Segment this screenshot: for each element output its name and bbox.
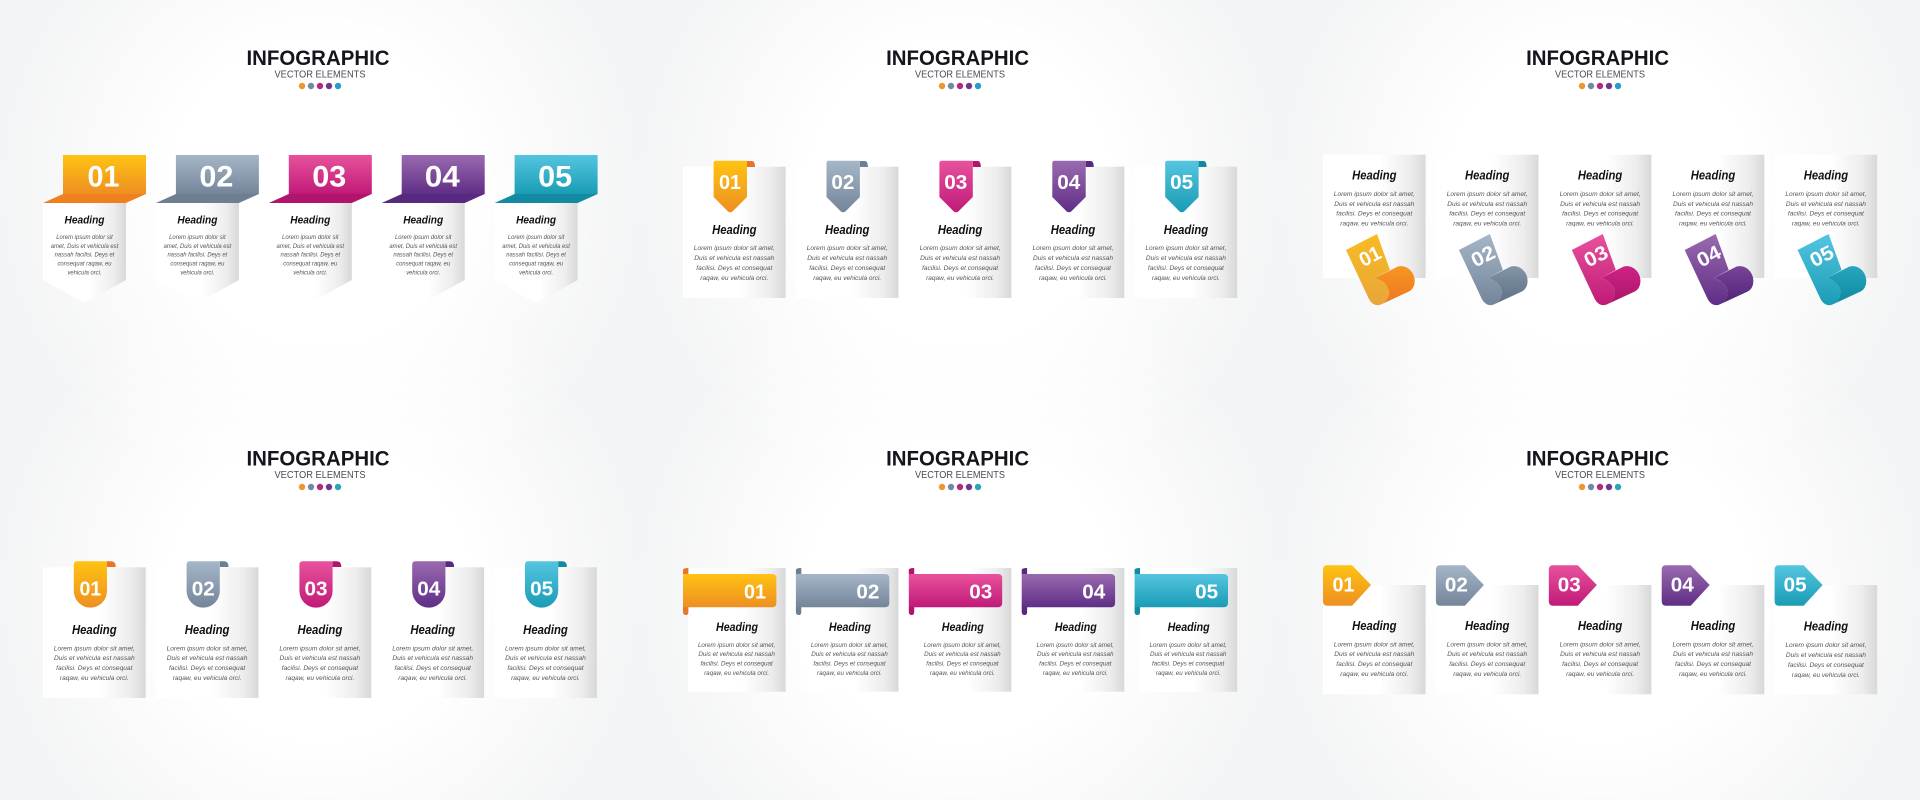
card 03: 03 bbox=[944, 172, 967, 194]
card 02: Lorem ipsum dolor sit bbox=[169, 234, 226, 241]
card 04: raqaw, eu vehicula orci. bbox=[1679, 671, 1747, 678]
card 05 bbox=[1775, 565, 1877, 694]
card 04 bbox=[1022, 161, 1124, 298]
card 04 bbox=[382, 155, 485, 303]
card 01: Heading bbox=[1352, 619, 1397, 633]
card 05 bbox=[1135, 161, 1237, 298]
card 03: raqaw, eu vehicula orci. bbox=[286, 675, 354, 682]
card 01: 01 bbox=[1356, 242, 1385, 272]
title block 6 bbox=[1526, 447, 1669, 490]
card 02: 02 bbox=[1445, 575, 1468, 597]
card 04: 04 bbox=[1693, 241, 1726, 272]
card 04 bbox=[1022, 568, 1124, 692]
card 02: 02 bbox=[1468, 242, 1499, 272]
card 05: Heading bbox=[516, 214, 556, 226]
card 04: amet, Duis et vehicula est bbox=[389, 243, 457, 250]
card 03: Lorem ipsum dolor sit bbox=[282, 234, 339, 241]
card 04: raqaw, eu vehicula orci. bbox=[1039, 275, 1107, 282]
card 02: Heading bbox=[825, 223, 870, 237]
card 04: consequat raqaw, eu bbox=[396, 260, 451, 267]
card 03: Duis et vehicula est nassah bbox=[1560, 651, 1640, 658]
card 04 bbox=[381, 561, 484, 698]
card 02: Heading bbox=[177, 214, 218, 226]
card 03: 03 bbox=[312, 160, 346, 194]
card 02: Lorem ipsum dolor sit amet, bbox=[167, 646, 248, 652]
card 05: raqaw, eu vehicula orci. bbox=[1152, 275, 1220, 282]
card 03: Lorem ipsum dolor sit amet, bbox=[920, 245, 1001, 252]
card 04: facilisi. Deys et consequat bbox=[1675, 661, 1752, 668]
card 02: Lorem ipsum dolor sit amet, bbox=[1447, 642, 1528, 648]
card 05: Lorem ipsum dolor sit bbox=[508, 234, 565, 241]
card 03: amet, Duis et vehicula est bbox=[276, 243, 344, 250]
card 05: amet, Duis et vehicula est bbox=[502, 243, 570, 250]
card 02: nassah facilisi. Deys et bbox=[168, 252, 228, 259]
card 04: 04 bbox=[417, 579, 441, 601]
card 03 bbox=[909, 568, 1011, 692]
panel 2: bookmark arrows bbox=[683, 46, 1237, 298]
card 01 bbox=[43, 561, 146, 698]
card 04: raqaw, eu vehicula orci. bbox=[1043, 670, 1108, 677]
card 01: Duis et vehicula est nassah bbox=[54, 655, 135, 662]
card 04: Lorem ipsum dolor sit bbox=[395, 234, 452, 241]
card 05: 05 bbox=[1170, 172, 1193, 194]
card 02: Lorem ipsum dolor sit amet, bbox=[807, 245, 888, 252]
card 04: nassah facilisi. Deys et bbox=[393, 252, 453, 259]
card 04: facilisi. Deys et consequat bbox=[395, 665, 472, 672]
title block 5: INFOGRAPHIC bbox=[886, 447, 1029, 471]
card 04: facilisi. Deys et consequat bbox=[1039, 660, 1113, 668]
card 03: Duis et vehicula est nassah bbox=[1560, 201, 1640, 208]
card 03: facilisi. Deys et consequat bbox=[926, 660, 1000, 668]
card 04: Duis et vehicula est nassah bbox=[392, 655, 473, 662]
card 01: facilisi. Deys et consequat bbox=[696, 265, 773, 272]
card 03: vehicula orci. bbox=[293, 269, 327, 276]
card 05 bbox=[1775, 155, 1877, 305]
card 02: facilisi. Deys et consequat bbox=[169, 665, 246, 672]
card 02: 02 bbox=[199, 160, 233, 194]
card 01: Duis et vehicula est nassah bbox=[698, 651, 775, 658]
title block 5: VECTOR ELEMENTS bbox=[915, 470, 1005, 481]
card 02 bbox=[1436, 565, 1538, 694]
card 02: Heading bbox=[185, 623, 230, 637]
card 02 bbox=[156, 155, 259, 303]
card 01: facilisi. Deys et consequat bbox=[1336, 211, 1413, 218]
card 03: facilisi. Deys et consequat bbox=[922, 265, 999, 272]
card 01: Lorem ipsum dolor sit amet, bbox=[1334, 642, 1415, 648]
card 01: Duis et vehicula est nassah bbox=[1334, 651, 1415, 658]
card 05 bbox=[495, 155, 598, 303]
card 05: Duis et vehicula est nassah bbox=[505, 655, 586, 662]
card 05: Heading bbox=[1804, 168, 1848, 182]
card 01: 01 bbox=[88, 160, 120, 194]
card 05: Heading bbox=[1168, 620, 1210, 634]
title block 3 bbox=[1526, 46, 1669, 89]
card 04: 04 bbox=[1057, 172, 1081, 194]
title block 4 bbox=[246, 447, 390, 490]
panel 6: arrow tags bbox=[1323, 447, 1877, 694]
title block 2: VECTOR ELEMENTS bbox=[915, 70, 1005, 81]
card 01: 01 bbox=[744, 581, 766, 603]
card 01: Duis et vehicula est nassah bbox=[694, 255, 775, 262]
card 04: Duis et vehicula est nassah bbox=[1037, 651, 1114, 658]
card 05: Lorem ipsum dolor sit amet, bbox=[1785, 642, 1867, 649]
card 04: raqaw, eu vehicula orci. bbox=[398, 675, 467, 682]
card 04: Duis et vehicula est nassah bbox=[1673, 651, 1753, 658]
card 03: consequat raqaw, eu bbox=[283, 260, 338, 267]
card 01: raqaw, eu vehicula orci. bbox=[1340, 671, 1408, 678]
card 01: amet, Duis et vehicula est bbox=[51, 243, 119, 250]
card 02: Duis et vehicula est nassah bbox=[1447, 201, 1527, 208]
card 05: facilisi. Deys et consequat bbox=[1788, 211, 1865, 218]
card 05: Lorem ipsum dolor sit amet, bbox=[1150, 642, 1227, 649]
card 04: Heading bbox=[403, 214, 443, 226]
card 03: Duis et vehicula est nassah bbox=[280, 655, 360, 662]
card 04: facilisi. Deys et consequat bbox=[1035, 265, 1112, 272]
panel 3: rolled tags bbox=[1323, 46, 1877, 305]
card 02: consequat raqaw, eu bbox=[170, 260, 225, 267]
card 03: Heading bbox=[1578, 168, 1623, 182]
card 04: Lorem ipsum dolor sit amet, bbox=[392, 646, 473, 652]
card 01: Lorem ipsum dolor sit amet, bbox=[694, 245, 775, 252]
card 04: Lorem ipsum dolor sit amet, bbox=[1673, 642, 1754, 648]
title block 5 bbox=[886, 447, 1029, 490]
card 02: 02 bbox=[192, 579, 215, 601]
card 03: Heading bbox=[942, 620, 984, 634]
card 01: nassah facilisi. Deys et bbox=[55, 252, 115, 259]
card 04: facilisi. Deys et consequat bbox=[1675, 211, 1752, 218]
title block 1: VECTOR ELEMENTS bbox=[274, 70, 366, 81]
card 03 bbox=[269, 155, 372, 303]
card 05: vehicula orci. bbox=[519, 269, 553, 276]
card 03: facilisi. Deys et consequat bbox=[1562, 661, 1639, 668]
card 04: raqaw, eu vehicula orci. bbox=[1679, 221, 1747, 228]
card 05: 05 bbox=[538, 160, 572, 194]
card 03: Lorem ipsum dolor sit amet, bbox=[1560, 642, 1641, 648]
card 04: 04 bbox=[425, 160, 460, 194]
card 01: 01 bbox=[1332, 575, 1354, 597]
card 02: Heading bbox=[1465, 168, 1510, 182]
title block 3: INFOGRAPHIC bbox=[1526, 46, 1669, 70]
card 04: Lorem ipsum dolor sit amet, bbox=[1037, 642, 1114, 649]
card 05: Duis et vehicula est nassah bbox=[1786, 652, 1866, 659]
card 03: 03 bbox=[1581, 242, 1612, 272]
card 05: facilisi. Deys et consequat bbox=[1788, 662, 1865, 669]
card 01: facilisi. Deys et consequat bbox=[700, 660, 774, 668]
card 02: Duis et vehicula est nassah bbox=[1447, 651, 1527, 658]
card 02: 02 bbox=[856, 581, 879, 603]
card 03: facilisi. Deys et consequat bbox=[282, 665, 359, 672]
card 02: Lorem ipsum dolor sit amet, bbox=[811, 642, 888, 649]
card 05: 05 bbox=[530, 579, 553, 601]
card 03 bbox=[909, 161, 1011, 298]
card 01: raqaw, eu vehicula orci. bbox=[1340, 221, 1408, 228]
card 02: Heading bbox=[1465, 619, 1510, 633]
card 03: 03 bbox=[305, 579, 328, 601]
card 05: raqaw, eu vehicula orci. bbox=[511, 675, 580, 682]
card 02: amet, Duis et vehicula est bbox=[164, 243, 231, 250]
card 04: Duis et vehicula est nassah bbox=[1673, 201, 1753, 208]
title block 1 bbox=[246, 46, 390, 89]
card 01: consequat raqaw, eu bbox=[58, 260, 112, 267]
card 01 bbox=[43, 155, 146, 303]
title block 2 bbox=[886, 46, 1029, 89]
card 04: Lorem ipsum dolor sit amet, bbox=[1032, 245, 1114, 252]
card 05: 05 bbox=[1784, 575, 1807, 597]
card 04 bbox=[1662, 565, 1764, 694]
card 05: raqaw, eu vehicula orci. bbox=[1156, 670, 1221, 677]
card 01: Lorem ipsum dolor sit bbox=[56, 234, 113, 241]
card 05: raqaw, eu vehicula orci. bbox=[1792, 672, 1860, 679]
title block 1: INFOGRAPHIC bbox=[246, 46, 390, 70]
card 01 bbox=[1323, 155, 1426, 305]
card 03: Duis et vehicula est nassah bbox=[920, 255, 1000, 262]
card 02 bbox=[796, 161, 898, 298]
card 04: Heading bbox=[410, 623, 455, 637]
card 05: consequat raqaw, eu bbox=[509, 260, 564, 267]
card 02: Lorem ipsum dolor sit amet, bbox=[1447, 191, 1528, 198]
card 02: Duis et vehicula est nassah bbox=[807, 255, 887, 262]
panel 5: horizontal wrap banners bbox=[683, 447, 1237, 692]
title block 4: INFOGRAPHIC bbox=[246, 447, 390, 471]
card 02: facilisi. Deys et consequat bbox=[813, 660, 887, 668]
card 02: raqaw, eu vehicula orci. bbox=[1453, 671, 1521, 678]
card 02: 02 bbox=[831, 172, 854, 194]
card 04: Heading bbox=[1051, 223, 1096, 237]
card 05: Heading bbox=[1164, 223, 1208, 237]
card 05: Lorem ipsum dolor sit amet, bbox=[1785, 191, 1867, 198]
card 02 bbox=[796, 568, 898, 692]
card 02: raqaw, eu vehicula orci. bbox=[1453, 221, 1521, 228]
card 03 bbox=[1549, 565, 1651, 694]
card 01: Heading bbox=[1352, 168, 1397, 182]
card 04: Heading bbox=[1055, 620, 1097, 634]
card 01: Heading bbox=[64, 214, 105, 226]
card 04: Heading bbox=[1691, 168, 1736, 182]
title block 4: VECTOR ELEMENTS bbox=[274, 470, 366, 481]
card 01: 01 bbox=[719, 172, 741, 194]
card 05: Duis et vehicula est nassah bbox=[1146, 255, 1226, 262]
panel 4: rounded bookmarks bbox=[43, 447, 597, 698]
card 05: Lorem ipsum dolor sit amet, bbox=[1145, 245, 1227, 252]
card 01 bbox=[683, 568, 786, 692]
card 05: facilisi. Deys et consequat bbox=[1152, 660, 1225, 668]
card 04: Heading bbox=[1691, 619, 1736, 633]
card 05: facilisi. Deys et consequat bbox=[507, 665, 585, 672]
card 01: Lorem ipsum dolor sit amet, bbox=[698, 642, 775, 649]
card 05: Lorem ipsum dolor sit amet, bbox=[505, 646, 586, 652]
card 03: Heading bbox=[938, 223, 983, 237]
card 02 bbox=[156, 561, 258, 698]
card 02: raqaw, eu vehicula orci. bbox=[813, 275, 881, 282]
card 01: Heading bbox=[72, 623, 117, 637]
card 02: raqaw, eu vehicula orci. bbox=[817, 670, 882, 677]
card 03: Lorem ipsum dolor sit amet, bbox=[1560, 191, 1641, 198]
card 02: Heading bbox=[829, 620, 871, 634]
card 02: facilisi. Deys et consequat bbox=[809, 265, 886, 272]
card 04 bbox=[1662, 155, 1764, 305]
card 02: facilisi. Deys et consequat bbox=[1449, 661, 1526, 668]
card 02: raqaw, eu vehicula orci. bbox=[173, 675, 242, 682]
card 01: Duis et vehicula est nassah bbox=[1334, 201, 1415, 208]
card 04: Lorem ipsum dolor sit amet, bbox=[1673, 191, 1754, 198]
card 03: raqaw, eu vehicula orci. bbox=[926, 275, 994, 282]
card 03 bbox=[269, 561, 371, 698]
card 05: facilisi. Deys et consequat bbox=[1148, 265, 1225, 272]
card 05: raqaw, eu vehicula orci. bbox=[1792, 221, 1860, 228]
card 03: facilisi. Deys et consequat bbox=[1562, 211, 1639, 218]
card 03: Duis et vehicula est nassah bbox=[924, 651, 1001, 658]
card 03: nassah facilisi. Deys et bbox=[280, 252, 340, 259]
card 03: Heading bbox=[298, 623, 343, 637]
card 01: facilisi. Deys et consequat bbox=[1336, 661, 1413, 668]
card 01: facilisi. Deys et consequat bbox=[56, 665, 134, 672]
card 01: Heading bbox=[712, 223, 757, 237]
card 01: raqaw, eu vehicula orci. bbox=[700, 275, 768, 282]
card 01 bbox=[683, 161, 786, 298]
card 02: Duis et vehicula est nassah bbox=[167, 655, 248, 662]
card 01: Lorem ipsum dolor sit amet, bbox=[54, 646, 135, 652]
card 05: Duis et vehicula est nassah bbox=[1150, 651, 1227, 658]
card 05 bbox=[1135, 568, 1237, 692]
card 02: vehicula orci. bbox=[180, 269, 214, 276]
title block 3: VECTOR ELEMENTS bbox=[1555, 70, 1645, 81]
card 05: nassah facilisi. Deys et bbox=[506, 252, 566, 259]
card 03 bbox=[1549, 155, 1651, 305]
card 05: 05 bbox=[1195, 581, 1218, 603]
card 05: Duis et vehicula est nassah bbox=[1786, 201, 1866, 208]
card 03: 03 bbox=[1558, 575, 1581, 597]
title block 2: INFOGRAPHIC bbox=[886, 46, 1029, 70]
card 01: Lorem ipsum dolor sit amet, bbox=[1334, 191, 1415, 198]
card 03: 03 bbox=[969, 581, 992, 603]
card 04: Duis et vehicula est nassah bbox=[1033, 255, 1113, 262]
card 05: Heading bbox=[1804, 620, 1848, 634]
card 01: raqaw, eu vehicula orci. bbox=[60, 675, 129, 682]
card 02: Duis et vehicula est nassah bbox=[811, 651, 888, 658]
card 03: raqaw, eu vehicula orci. bbox=[1566, 671, 1634, 678]
card 04: 04 bbox=[1082, 581, 1106, 603]
card 01 bbox=[1323, 565, 1426, 694]
card 02 bbox=[1436, 155, 1538, 305]
card 04: 04 bbox=[1671, 575, 1695, 597]
card 03: Heading bbox=[1578, 619, 1623, 633]
card 04: vehicula orci. bbox=[406, 269, 440, 276]
card 03: Lorem ipsum dolor sit amet, bbox=[924, 642, 1001, 649]
panel 1: folded banners bbox=[43, 46, 598, 303]
card 01: 01 bbox=[80, 579, 101, 601]
title block 6: VECTOR ELEMENTS bbox=[1555, 470, 1645, 481]
card 01: raqaw, eu vehicula orci. bbox=[704, 670, 769, 677]
card 02: facilisi. Deys et consequat bbox=[1449, 211, 1526, 218]
card 05: 05 bbox=[1806, 242, 1838, 272]
card 03: raqaw, eu vehicula orci. bbox=[1566, 221, 1634, 228]
card 03: Heading bbox=[290, 214, 331, 226]
card 05: Heading bbox=[523, 623, 568, 637]
card 01: vehicula orci. bbox=[68, 269, 102, 276]
card 03: raqaw, eu vehicula orci. bbox=[930, 670, 995, 677]
title block 6: INFOGRAPHIC bbox=[1526, 447, 1669, 471]
card 03: Lorem ipsum dolor sit amet, bbox=[279, 646, 361, 652]
card 05 bbox=[494, 561, 597, 698]
card 01: Heading bbox=[716, 620, 759, 634]
